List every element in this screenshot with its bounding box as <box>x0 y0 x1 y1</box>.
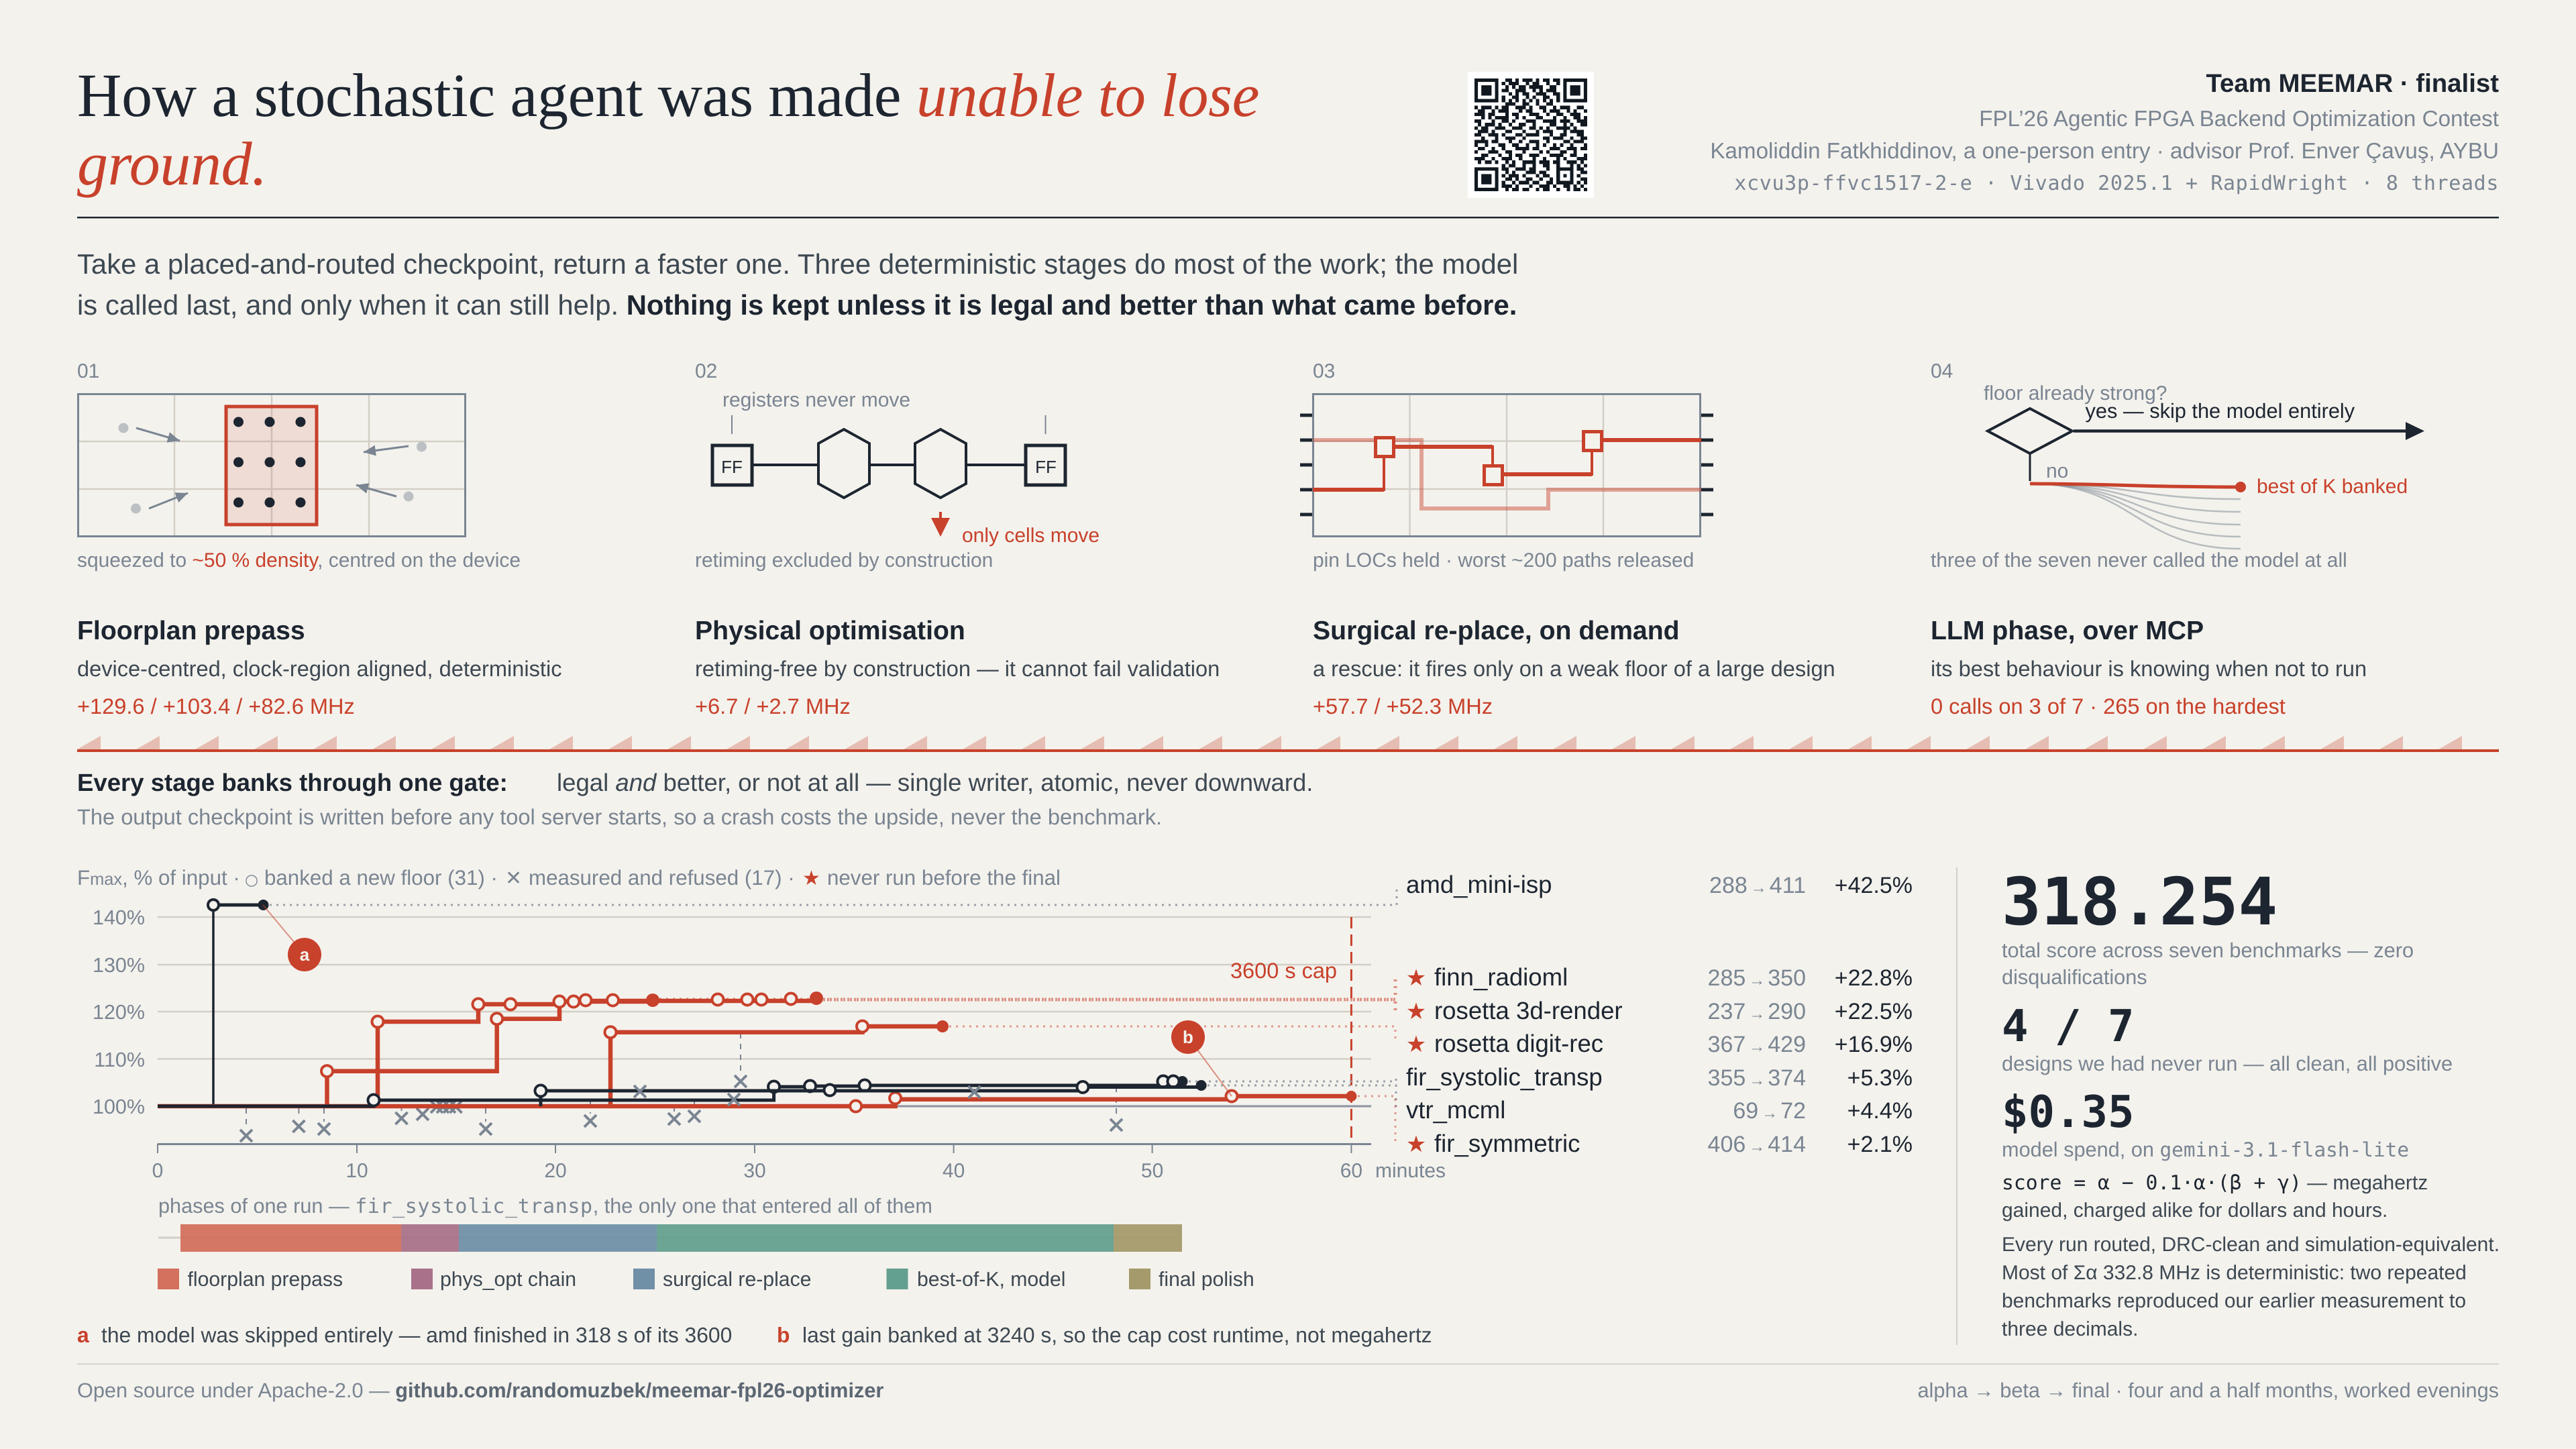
footer: alpha → beta → final · four and a half months, worked evenings <box>1917 1379 2499 1402</box>
gridlines and y axis labels: 120% <box>93 1001 145 1024</box>
benchmark table: ★ <box>1406 1031 1426 1058</box>
callout b <box>1171 1020 1232 1096</box>
phases of one run: phases of one run — fir_systolic_transp, the only one that entered all of them <box>158 1195 932 1218</box>
phase legend: best-of-K, model <box>917 1269 1065 1291</box>
panel: stage 03 surgical re-place <box>1300 360 1835 718</box>
footer <box>77 1379 2499 1402</box>
stat: model spend: model spend, on gemini-3.1-flash-lite <box>2002 1138 2409 1161</box>
benchmark table: ★ <box>1406 998 1426 1025</box>
diagram: FF and cells chain: FF <box>1035 457 1057 477</box>
panel: stage 02 physical optimisation: +6.7 / +2.7 MHz <box>695 694 851 718</box>
panel: stage 04 LLM phase: its best behaviour is knowing when not to run <box>1931 656 2367 681</box>
callout a <box>263 905 321 971</box>
x axis: 0 <box>152 1160 163 1182</box>
stat: total score <box>2002 864 2414 989</box>
benchmark table: fir_symmetric <box>1434 1130 1580 1157</box>
diagram: decision and branches: no <box>2046 460 2068 482</box>
gate rule with ratchet teeth <box>77 736 2499 752</box>
x axis <box>152 1144 1446 1182</box>
chart legend: ★ <box>802 867 820 890</box>
benchmark table: 355→374 <box>1708 1065 1806 1091</box>
phase legend: floorplan prepass <box>188 1269 343 1291</box>
chart notes: the model was skipped entirely — amd finished in 318 s of its 3600 <box>101 1323 732 1347</box>
panel: stage 02 physical optimisation: Physical optimisation <box>695 616 965 645</box>
diagram: FF and cells chain: only cells move <box>962 525 1099 547</box>
panel: stage 02 physical optimisation: 02 <box>695 360 717 382</box>
chart: Fmax over time <box>93 887 1446 1182</box>
footer: Open source under Apache-2.0 — github.com/randomuzbek/meemar-fpl26-optimizer <box>77 1379 883 1402</box>
benchmark table: +42.5% <box>1835 873 1913 898</box>
benchmark table <box>1406 871 1913 1158</box>
series: finn_radioml <box>321 1001 816 1106</box>
team credits: xcvu3p-ffvc1517-2-e · Vivado 2025.1 + RapidWright · 8 threads <box>1734 172 2499 195</box>
phase legend: final polish <box>1159 1269 1254 1291</box>
stat: designs never run: 4 / 7 <box>2002 1001 2134 1052</box>
gate statement: Every stage banks through one gate: <box>77 769 508 796</box>
intro text: Take a placed-and-routed checkpoint, return a faster one. Three deterministic stages do most of the work; the model <box>77 248 1518 280</box>
3600 s cap line: 3600 s cap <box>1230 959 1337 983</box>
panel: stage 02 physical optimisation: retiming-free by construction — it cannot fail validation <box>695 656 1220 681</box>
x axis: 10 <box>345 1160 368 1182</box>
panel: stage 01 floorplan prepass: +129.6 / +103.4 / +82.6 MHz <box>77 694 355 718</box>
intro text <box>77 248 1518 321</box>
benchmark table: 237→290 <box>1708 999 1806 1024</box>
benchmark table: 367→429 <box>1708 1032 1806 1057</box>
title <box>77 61 1259 198</box>
phases of one run <box>158 1195 1254 1291</box>
stat: model spend: $0.35 <box>2002 1087 2134 1138</box>
team credits <box>1710 69 2499 195</box>
panel: stage 03 surgical re-place: a rescue: it fires only on a weak floor of a large design <box>1313 656 1835 681</box>
panel: stage 04 LLM phase: 0 calls on 3 of 7 · 265 on the hardest <box>1931 694 2286 718</box>
diagram: FF and cells chain: FF <box>721 457 743 477</box>
panel: stage 01 floorplan prepass <box>77 360 562 718</box>
chart notes: a <box>77 1323 89 1347</box>
benchmark table: +4.4% <box>1847 1098 1913 1124</box>
benchmark table: rosetta 3d-render <box>1434 997 1623 1024</box>
benchmark table: 406→414 <box>1708 1132 1806 1157</box>
panel: stage 01 floorplan prepass: Floorplan prepass <box>77 616 305 645</box>
stats column <box>2002 864 2500 1340</box>
panel: stage 01 floorplan prepass: squeezed to ~50 % density, centred on the device <box>77 549 521 572</box>
benchmark table: +2.1% <box>1847 1132 1913 1157</box>
benchmark table: amd_mini-isp <box>1406 871 1552 898</box>
leaders to benchmark labels <box>263 887 1397 1144</box>
gridlines and y axis labels <box>93 906 1371 1118</box>
callout b: b <box>1183 1027 1193 1047</box>
gate statement: The output checkpoint is written before any tool server starts, so a crash costs the upside, never the benchmark. <box>77 804 1162 829</box>
benchmark table: 69→72 <box>1733 1098 1806 1124</box>
panel: stage 03 surgical re-place: 03 <box>1313 360 1335 382</box>
stat: designs never run <box>2002 1001 2453 1075</box>
panel: stage 02 physical optimisation <box>695 360 1220 718</box>
benchmark table: +16.9% <box>1835 1032 1913 1057</box>
team credits: Team MEEMAR · finalist <box>2206 69 2499 98</box>
panel: stage 04 LLM phase: three of the seven never called the model at all <box>1931 549 2347 572</box>
chart legend: banked a new floor (31) · <box>264 866 498 890</box>
phase legend <box>158 1269 1254 1291</box>
benchmark table: ★ <box>1406 965 1426 991</box>
gate statement <box>77 769 1313 829</box>
series: fir_systolic_transp <box>158 1076 1187 1106</box>
stat: designs never run: designs we had never run — all clean, all positive <box>2002 1052 2453 1075</box>
panel: stage 04 LLM phase <box>1931 360 2424 718</box>
panel: stage 01 floorplan prepass: 01 <box>77 360 99 382</box>
gridlines and y axis labels: 140% <box>93 906 145 929</box>
panel: stage 01 floorplan prepass: device-centred, clock-region aligned, deterministic <box>77 656 562 681</box>
benchmark table: fir_systolic_transp <box>1406 1063 1603 1091</box>
refused measurements (under lines) <box>240 1033 1122 1142</box>
diagram: decision and branches: yes — skip the model entirely <box>2085 399 2355 423</box>
refused measurements (over lines) <box>634 1075 981 1106</box>
panel: stage 02 physical optimisation: retiming excluded by construction <box>695 549 993 572</box>
diagram: decision and branches: best of K banked <box>2257 476 2408 498</box>
panel: stage 03 surgical re-place: +57.7 / +52.3 MHz <box>1313 694 1493 718</box>
x axis: 40 <box>943 1160 965 1182</box>
callout a: a <box>300 945 310 965</box>
team credits: Kamoliddin Fatkhiddinov, a one-person entry · advisor Prof. Enver Çavuş, AYBU <box>1710 139 2499 164</box>
chart legend: never run before the final <box>827 866 1061 890</box>
benchmark table: +22.5% <box>1835 999 1913 1024</box>
diagram: FF and cells chain <box>712 389 1099 547</box>
series: amd_mini-isp <box>208 900 268 1106</box>
intro text: is called last, and only when it can still help. Nothing is kept unless it is legal and better than what came before. <box>77 289 1517 321</box>
panel: stage 03 surgical re-place: Surgical re-place, on demand <box>1313 616 1680 645</box>
x axis: 60 <box>1340 1160 1362 1182</box>
benchmark table: +22.8% <box>1835 965 1913 991</box>
closing note: three decimals. <box>2002 1318 2138 1340</box>
phase legend: surgical re-place <box>663 1269 811 1291</box>
benchmark table: finn_radioml <box>1434 963 1568 991</box>
diagram: floorplan squeeze <box>77 393 466 537</box>
diagram: re-placed paths <box>1300 393 1713 537</box>
phase bar <box>180 1224 1182 1252</box>
gridlines and y axis labels: 130% <box>93 954 145 977</box>
chart notes: b <box>777 1323 790 1347</box>
gate statement: legal and better, or not at all — single writer, atomic, never downward. <box>557 769 1313 796</box>
panel: stage 04 LLM phase: 04 <box>1931 360 1953 382</box>
benchmark table: 285→350 <box>1708 965 1806 991</box>
benchmark table: +5.3% <box>1847 1065 1913 1091</box>
score formula: score = α − 0.1·α·(β + γ) — megahertz <box>2002 1171 2428 1195</box>
stat: total score: disqualifications <box>2002 965 2147 989</box>
panel: stage 03 surgical re-place: pin LOCs held · worst ~200 paths released <box>1313 549 1694 572</box>
benchmark table: rosetta digit-rec <box>1434 1030 1603 1057</box>
x axis: 30 <box>743 1160 766 1182</box>
stat: model spend <box>2002 1087 2409 1161</box>
closing note: Most of Σα 332.8 MHz is deterministic: two repeated <box>2002 1262 2467 1284</box>
gridlines and y axis labels: 100% <box>93 1095 145 1118</box>
QR code <box>1468 72 1594 198</box>
benchmark table: 288→411 <box>1709 873 1806 898</box>
x axis: 50 <box>1141 1160 1163 1182</box>
x axis: minutes <box>1375 1160 1446 1182</box>
chart legend: ○ <box>245 871 258 889</box>
chart notes: last gain banked at 3240 s, so the cap cost runtime, not megahertz <box>802 1323 1432 1347</box>
phase legend: phys_opt chain <box>440 1269 576 1291</box>
x axis: 20 <box>544 1160 567 1182</box>
title: How a stochastic agent was made unable to lose <box>77 61 1259 129</box>
benchmark table: ★ <box>1406 1131 1426 1158</box>
diagram: decision and branches <box>1984 382 2424 549</box>
chart legend: Fmax, % of input · <box>77 866 240 890</box>
score formula <box>2002 1171 2428 1222</box>
closing note: benchmarks reproduced our earlier measurement to <box>2002 1290 2466 1312</box>
chart legend: ✕ <box>505 867 522 890</box>
series: fir_symmetric <box>158 1091 1356 1112</box>
title: ground. <box>77 129 267 198</box>
chart notes <box>77 1323 1432 1347</box>
series: rosetta 3d-render <box>372 991 823 1106</box>
series: vtr_mcml <box>535 1080 1207 1106</box>
gridlines and y axis labels: 110% <box>94 1049 145 1071</box>
closing note <box>2002 1234 2500 1340</box>
diagram: FF and cells chain: registers never move <box>722 389 910 411</box>
series: rosetta digit-rec <box>605 1020 949 1106</box>
panel: stage 04 LLM phase: LLM phase, over MCP <box>1931 616 2204 645</box>
benchmark table: vtr_mcml <box>1406 1096 1505 1124</box>
score formula: gained, charged alike for dollars and hours. <box>2002 1199 2387 1222</box>
diagram: decision and branches: floor already strong? <box>1984 382 2167 405</box>
closing note: Every run routed, DRC-clean and simulation-equivalent. <box>2002 1234 2500 1256</box>
stat: total score: total score across seven benchmarks — zero <box>2002 938 2414 962</box>
chart legend: measured and refused (17) · <box>529 866 795 890</box>
stat: total score: 318.254 <box>2002 864 2277 941</box>
team credits: FPL’26 Agentic FPGA Backend Optimization Contest <box>1979 107 2499 131</box>
